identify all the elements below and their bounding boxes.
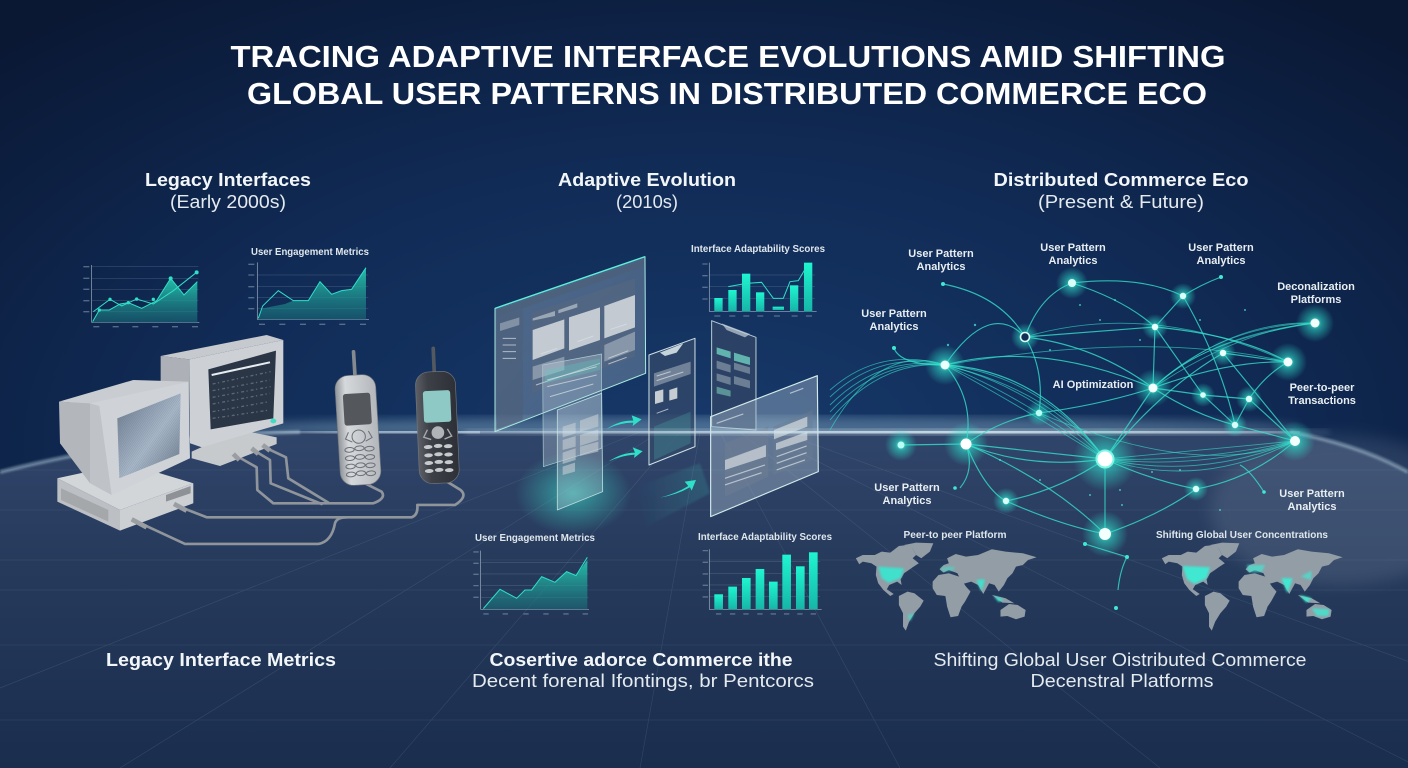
network labels: User Pattern xyxy=(874,482,940,494)
heading: legacy interfaces: Legacy Interfaces xyxy=(145,169,311,190)
network labels: Deconalization xyxy=(1277,281,1355,293)
network labels: Analytics xyxy=(917,261,965,273)
bar chart: interface adaptability scores lower: Interface Adaptability Scores xyxy=(698,531,832,543)
network graph xyxy=(830,267,1334,610)
panel: legacy interfaces xyxy=(57,169,463,670)
network labels: Analytics xyxy=(883,495,931,507)
horizon line xyxy=(465,429,1330,435)
caption: legacy interface metrics: Legacy Interface Metrics xyxy=(106,649,336,670)
network labels: Analytics xyxy=(1197,255,1245,267)
wide tablet window xyxy=(711,376,818,517)
title: GLOBAL USER PATTERNS IN DISTRIBUTED COMMERCE ECO xyxy=(247,76,1207,111)
line chart: user engagement metrics: User Engagement Metrics xyxy=(251,246,369,258)
network labels: AI Optimization xyxy=(1053,379,1134,391)
line chart: legacy small xyxy=(83,265,199,327)
caption: adaptive evolution: Cosertive adorce Commerce ithe xyxy=(490,649,792,670)
heading: legacy interfaces xyxy=(145,169,311,212)
illustration: legacy computers and phones xyxy=(57,335,463,544)
network labels: User Pattern xyxy=(908,248,974,260)
caption: distributed commerce xyxy=(934,649,1306,691)
nodes xyxy=(885,267,1334,610)
small particles xyxy=(947,299,1246,511)
combo chart: interface adaptability scores: Interface Adaptability Scores xyxy=(691,243,825,255)
heading: distributed commerce eco: Distributed Commerce Eco xyxy=(994,169,1248,190)
heading: adaptive evolution xyxy=(558,169,736,212)
heading: adaptive evolution: (2010s) xyxy=(616,191,678,212)
tablet pane xyxy=(543,354,602,467)
computer: front CRT xyxy=(57,380,193,531)
line chart: user engagement metrics xyxy=(248,246,369,324)
caption: distributed commerce: Decenstral Platforms xyxy=(1030,670,1214,691)
caption: adaptive evolution xyxy=(472,649,814,691)
network labels: User Pattern xyxy=(861,308,927,320)
combo chart: interface adaptability scores xyxy=(691,243,825,316)
heading: legacy interfaces: (Early 2000s) xyxy=(170,191,286,212)
interface panels xyxy=(495,257,818,535)
caption: adaptive evolution: Decent forenal Ifontings, br Pentcorcs xyxy=(472,670,814,691)
phone pane xyxy=(557,393,603,510)
network labels: Platforms xyxy=(1291,294,1341,306)
heading: distributed commerce eco xyxy=(994,169,1248,212)
computer: rear CRT xyxy=(161,335,283,466)
network labels xyxy=(861,242,1356,513)
network labels: Peer-to-peer xyxy=(1290,382,1355,394)
fan of flow lines xyxy=(830,323,1315,471)
network labels: Analytics xyxy=(870,321,918,333)
arrows xyxy=(607,415,696,498)
tall phone xyxy=(712,321,756,430)
network labels: User Pattern xyxy=(1040,242,1106,254)
world map: peer-to-peer platform: Peer-to peer Platform xyxy=(904,529,1006,541)
title xyxy=(230,39,1226,111)
cables xyxy=(133,447,463,544)
network labels: Analytics xyxy=(1288,501,1336,513)
connections xyxy=(894,277,1295,590)
mobile screen xyxy=(649,338,695,465)
network labels: User Pattern xyxy=(1279,488,1345,500)
network labels: Transactions xyxy=(1288,395,1356,407)
desktop window xyxy=(495,257,646,432)
title: TRACING ADAPTIVE INTERFACE EVOLUTIONS AMID SHIFTING xyxy=(230,39,1226,74)
network labels: Analytics xyxy=(1049,255,1097,267)
world map: shifting global user concentrations: Shifting Global User Concentrations xyxy=(1156,529,1328,541)
phone: silver xyxy=(333,351,382,486)
bar chart: interface adaptability scores lower xyxy=(698,531,832,614)
line chart: user engagement metrics lower xyxy=(473,532,595,614)
panel: distributed commerce eco xyxy=(830,169,1356,691)
heading: distributed commerce eco: (Present & Future) xyxy=(1038,191,1204,212)
world map: peer-to-peer platform xyxy=(856,529,1037,631)
network labels: User Pattern xyxy=(1188,242,1254,254)
caption: distributed commerce: Shifting Global User Oistributed Commerce xyxy=(934,649,1306,670)
heading: adaptive evolution: Adaptive Evolution xyxy=(558,169,736,190)
line chart: user engagement metrics lower: User Engagement Metrics xyxy=(475,532,595,544)
world map: shifting global user concentrations xyxy=(1156,529,1343,631)
panel: adaptive evolution xyxy=(472,169,832,691)
phone: dark xyxy=(414,347,460,484)
